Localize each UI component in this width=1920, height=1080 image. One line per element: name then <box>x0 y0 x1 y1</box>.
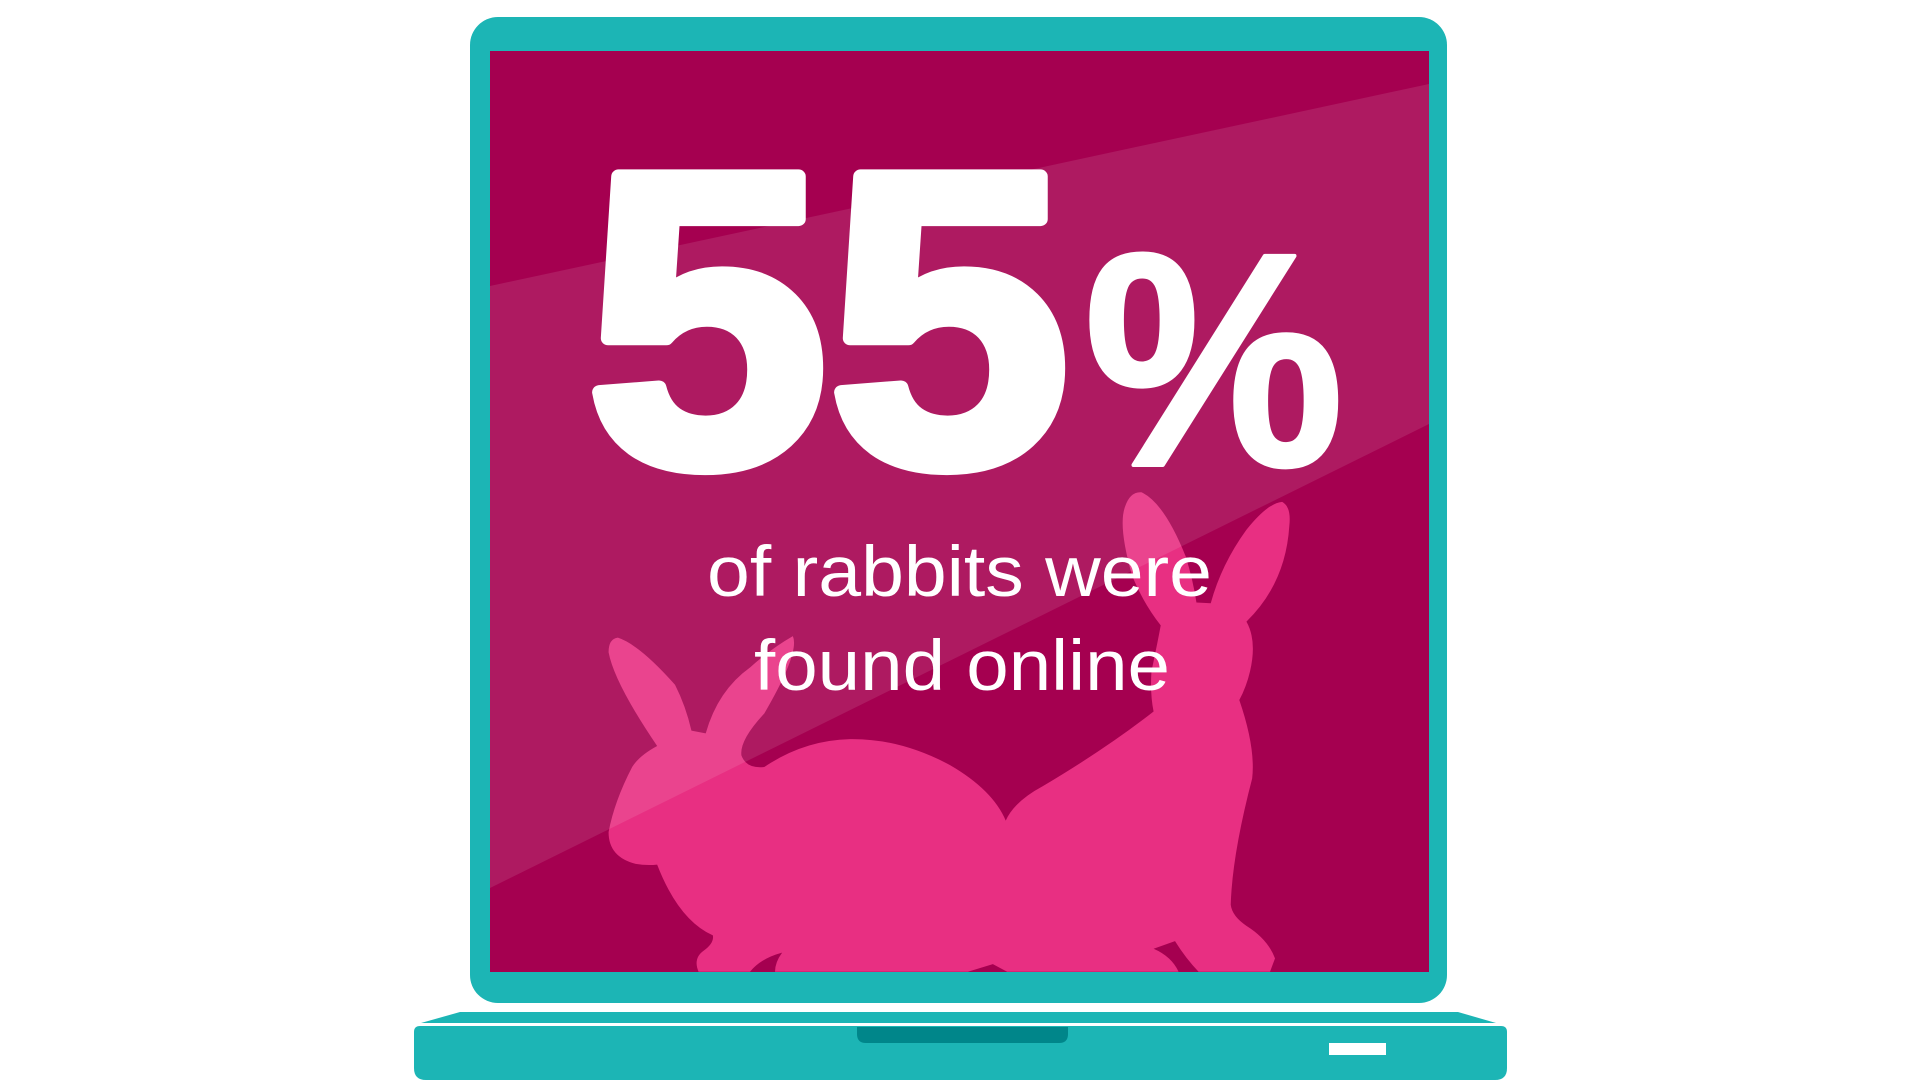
laptop bezel <box>470 17 1447 1003</box>
trackpad notch <box>857 1027 1068 1043</box>
headline figure 55%: % <box>1084 191 1344 530</box>
laptop base body <box>414 1026 1507 1080</box>
rabbit silhouettes <box>609 492 1290 972</box>
screen glare band <box>490 84 1429 888</box>
power indicator light <box>1329 1043 1386 1055</box>
caption <box>707 533 1212 706</box>
laptop screen <box>490 51 1429 972</box>
caption: found online <box>754 627 1170 706</box>
infographic: laptop showing rabbit statistic <box>414 17 1507 1080</box>
caption: of rabbits were <box>707 533 1212 612</box>
laptop base lid lip <box>421 1012 1496 1023</box>
headline figure 55%: 55 <box>586 86 1070 553</box>
headline figure 55% <box>586 86 1344 553</box>
